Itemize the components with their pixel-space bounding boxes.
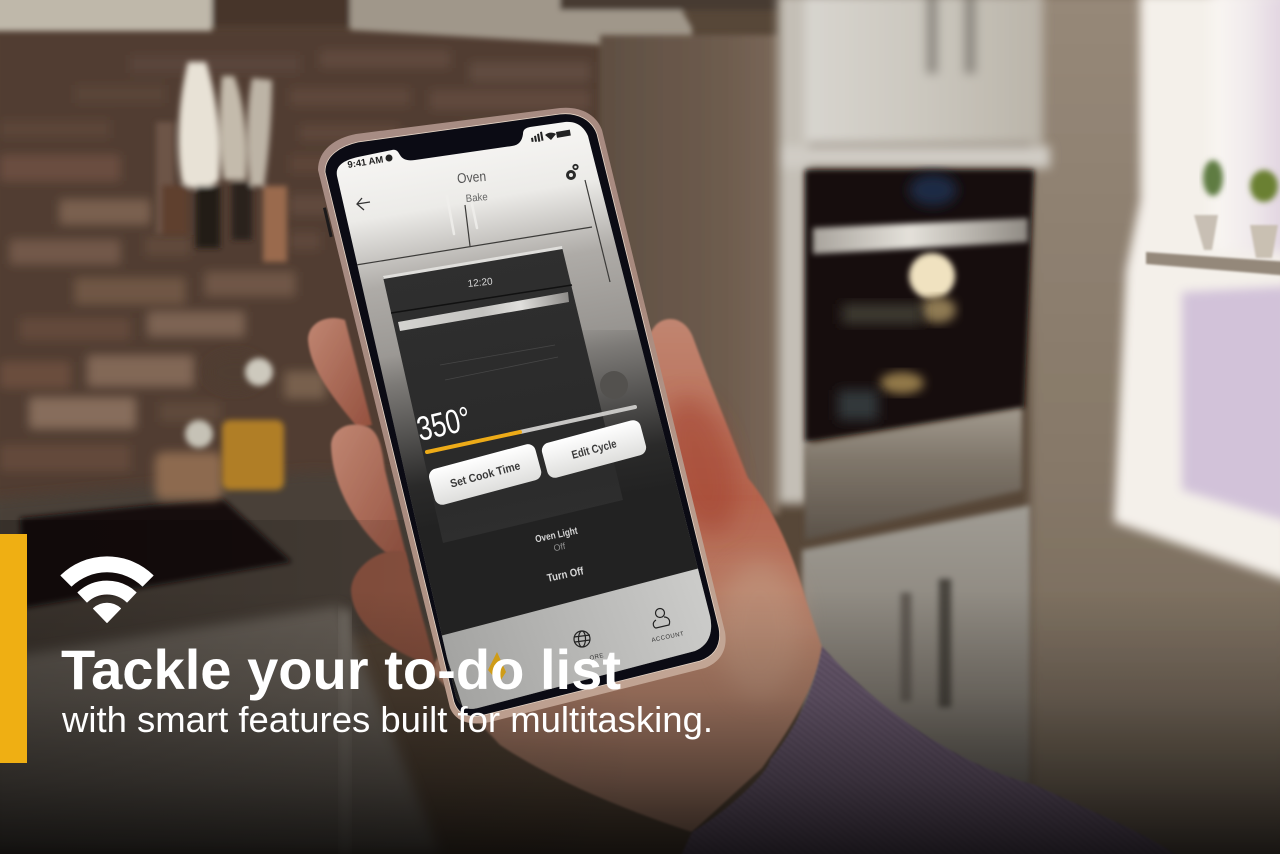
app oven [383,246,623,543]
set cook time button: Set Cook Time [449,460,522,491]
left dark shade [0,520,640,854]
counter, jars and sink [0,354,600,854]
pin button [600,371,628,394]
built-in oven [805,170,1034,540]
upper cabinet and range hood [0,0,780,50]
hand holding the phone [308,318,1180,854]
oven light label: Oven Light [534,526,579,545]
title: Tackle your to-do list [61,638,621,701]
app screen: ORE [589,653,605,662]
edit cycle button: Edit Cycle [570,438,618,462]
turn off action: Turn Off [546,565,585,585]
edit cycle button [540,418,648,480]
right tall cabinet and upper doors [778,0,1050,504]
icon: wifi [61,557,153,622]
bottom tab bar [442,568,712,709]
globe icon [574,631,590,647]
signal, wifi and battery [531,130,571,142]
screen title: Oven [456,168,487,186]
screen subtitle: Bake [465,191,488,205]
app screen [336,122,712,709]
temperature slider [427,407,635,452]
screen fade [381,330,711,709]
yellow accent bar [0,534,27,763]
centre wall [600,35,780,515]
back arrow [357,198,370,210]
knives on the wall [156,62,287,262]
cabinet lines [356,180,610,282]
phone bezel [325,114,720,716]
sweater sleeve [680,646,1180,854]
right wall column [1030,0,1280,854]
palm highlight [718,560,802,700]
smartphone [318,100,740,740]
cabinet handles [449,207,478,236]
oven rack lines [440,345,558,380]
palm and thumb [430,319,823,832]
lower cabinets [802,505,1030,854]
phone frame [318,108,726,723]
middle finger [331,424,410,570]
palm redness [649,389,751,541]
bottom dark gradient [0,590,1280,854]
status alarm icon [386,154,392,162]
temperature reading: 350° [413,400,474,449]
oven display: 12:20 [467,276,494,290]
home icon [488,652,506,683]
index finger [308,318,372,428]
account icon [653,608,670,628]
brick wall [0,25,602,505]
subtitle: with smart features built for multitasking. [61,699,713,740]
oven light state: Off [553,541,567,553]
tab labels: ACCOUNT [651,631,685,644]
settings gears [568,165,578,178]
side buttons [323,207,333,237]
ring finger [351,551,436,668]
set cook time button [427,442,543,507]
window and plants [1114,0,1280,582]
status time: 9:41 AM [347,154,384,171]
